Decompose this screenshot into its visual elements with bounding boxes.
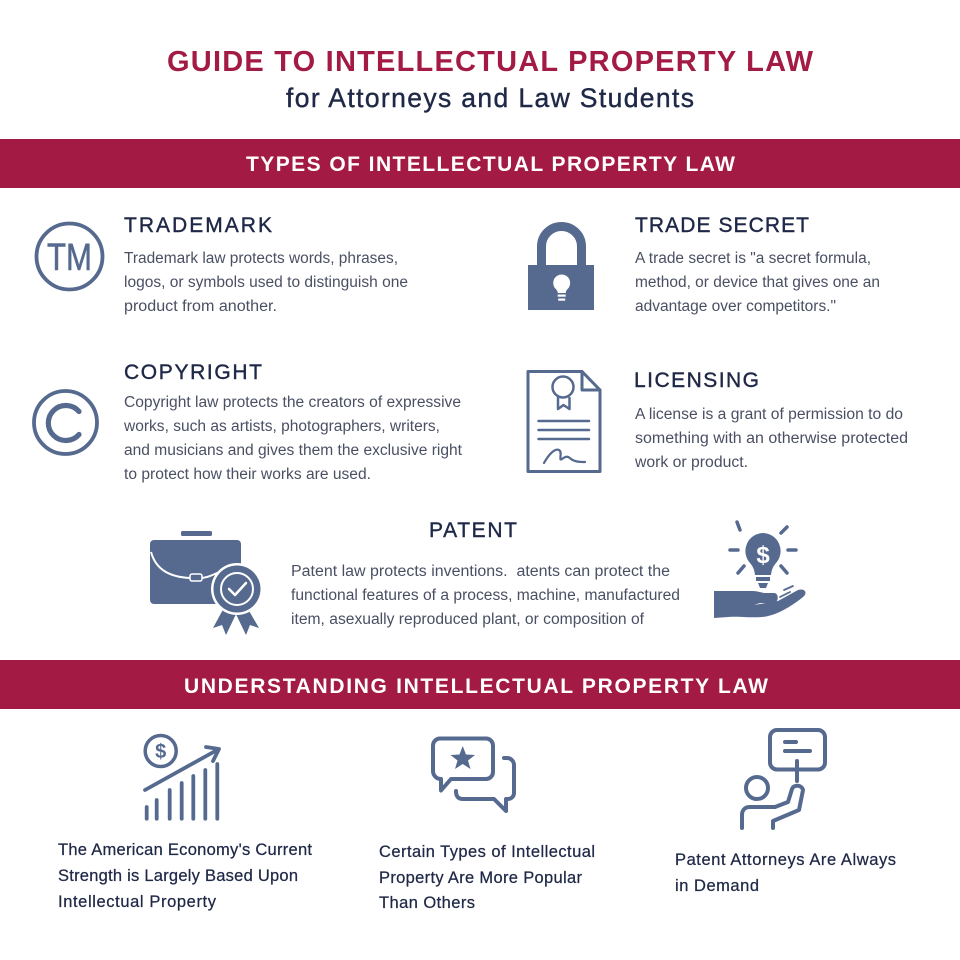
panel: copyright: to protect how their works are used. bbox=[124, 466, 371, 483]
panel: trademark: TRADEMARK bbox=[124, 214, 272, 237]
icon: rising chart with dollar bbox=[145, 736, 219, 819]
panel: patent: Patent law protects inventions. atents can protect the bbox=[291, 563, 670, 580]
icon: briefcase with medal bbox=[150, 531, 263, 635]
title bbox=[167, 46, 814, 113]
icon: licence document bbox=[528, 372, 600, 472]
text: patent attorneys: in Demand bbox=[675, 877, 759, 895]
panel: trademark: Trademark law protects words, phrases, bbox=[124, 250, 398, 267]
text: economy: Strength is Largely Based Upon bbox=[58, 867, 298, 885]
panel: trade secret: advantage over competitors." bbox=[635, 298, 836, 315]
icon: copyright bbox=[34, 391, 97, 454]
panel: trademark bbox=[124, 214, 408, 315]
panel: patent: functional features of a process, machine, manufactured bbox=[291, 587, 680, 604]
panel: patent: item, asexually reproduced plant, or composition of bbox=[291, 611, 645, 628]
icon: lock with bulb bbox=[528, 226, 594, 310]
text: popularity: Than Others bbox=[379, 894, 475, 912]
text: economy bbox=[58, 841, 312, 911]
text: popularity: Certain Types of Intellectual bbox=[379, 843, 595, 861]
icon: chat bubbles with star bbox=[433, 738, 514, 811]
panel: copyright: COPYRIGHT bbox=[124, 361, 262, 384]
panel: licensing: something with an otherwise protected bbox=[635, 430, 908, 447]
icon: hand with dollar bulb bbox=[714, 522, 805, 618]
panel: trademark: logos, or symbols used to distinguish one bbox=[124, 274, 408, 291]
text: patent attorneys bbox=[675, 851, 896, 895]
title: GUIDE TO INTELLECTUAL PROPERTY LAW bbox=[167, 46, 814, 78]
text: popularity bbox=[379, 843, 595, 912]
icon: rising chart with dollar: $ bbox=[155, 741, 166, 763]
title: for Attorneys and Law Students bbox=[286, 83, 694, 113]
panel: copyright: and musicians and gives them the exclusive right bbox=[124, 442, 463, 459]
panel: trademark: product from another. bbox=[124, 298, 277, 315]
section banner: understanding: UNDERSTANDING INTELLECTUAL PROPERTY LAW bbox=[184, 675, 768, 698]
icon: trademark bbox=[36, 224, 102, 290]
panel: licensing: A license is a grant of permission to do bbox=[635, 406, 903, 423]
panel: patent: PATENT bbox=[429, 519, 517, 542]
panel: trade secret: A trade secret is "a secret formula, bbox=[635, 250, 871, 267]
panel: patent bbox=[291, 519, 680, 628]
panel: copyright: Copyright law protects the creators of expressive bbox=[124, 394, 461, 411]
panel: copyright: works, such as artists, photographers, writers, bbox=[123, 418, 440, 435]
icon: trademark: TM bbox=[47, 237, 92, 279]
panel: licensing bbox=[634, 369, 908, 471]
section banner: understanding bbox=[0, 660, 960, 709]
section banner: types: TYPES OF INTELLECTUAL PROPERTY LAW bbox=[246, 153, 735, 176]
icon: person holding sign bbox=[742, 730, 825, 828]
section banner: types bbox=[0, 139, 960, 188]
text: patent attorneys: Patent Attorneys Are Always bbox=[675, 851, 896, 869]
text: economy: Intellectual Property bbox=[58, 893, 217, 911]
icon: hand with dollar bulb: $ bbox=[756, 542, 770, 569]
text: economy: The American Economy's Current bbox=[58, 841, 312, 859]
panel: trade secret bbox=[635, 214, 880, 315]
panel: licensing: work or product. bbox=[634, 454, 748, 471]
panel: trade secret: method, or device that gives one an bbox=[635, 274, 880, 291]
panel: licensing: LICENSING bbox=[634, 369, 759, 392]
panel: trade secret: TRADE SECRET bbox=[635, 214, 809, 237]
panel: copyright bbox=[123, 361, 463, 483]
text: popularity: Property Are More Popular bbox=[379, 869, 582, 887]
